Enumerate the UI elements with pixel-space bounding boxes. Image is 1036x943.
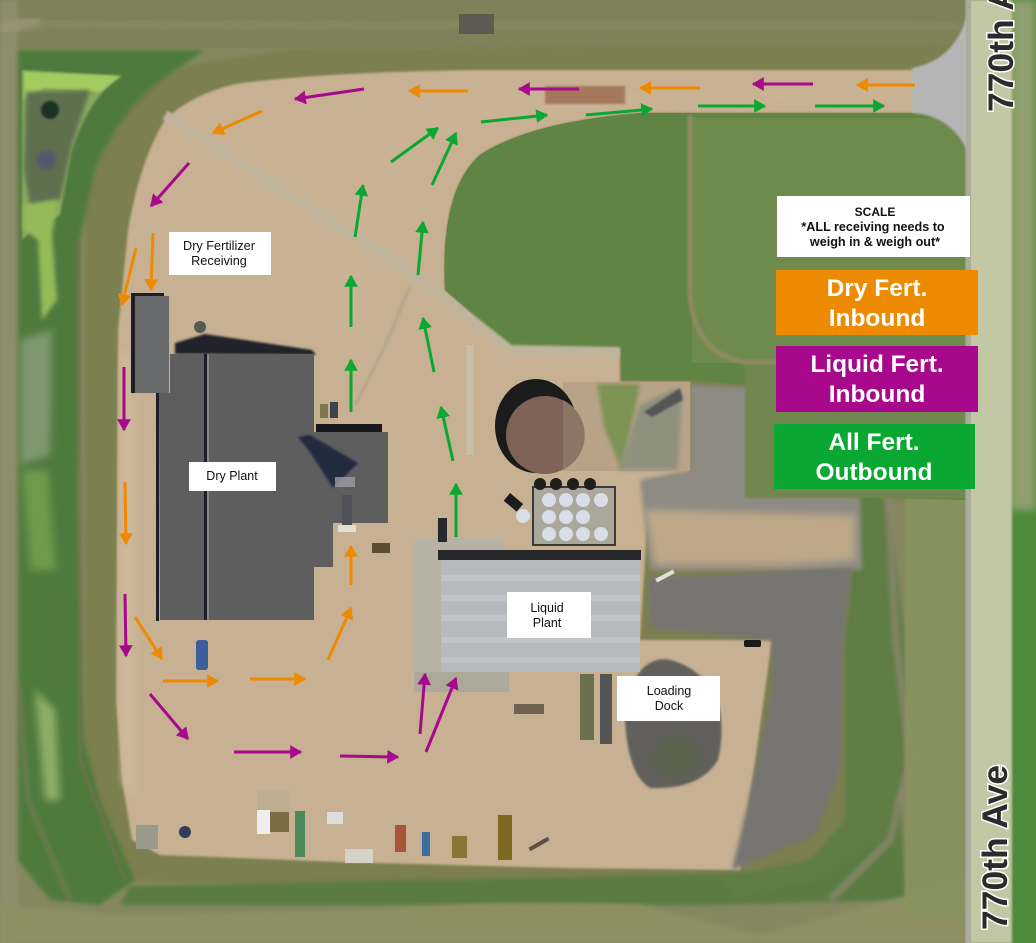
pipe rack and small shed north [459, 14, 625, 104]
liquid plant building [414, 518, 641, 692]
gravel drive [165, 115, 620, 352]
dark gravel pad [625, 659, 722, 788]
liquid plant loading equipment [514, 674, 612, 744]
olive ring around yard [85, 45, 966, 890]
legend: Dry Fert. Inbound [776, 270, 978, 335]
west wetland [18, 50, 205, 905]
label: Loading Dock: Dock [655, 699, 684, 713]
callout: scale note: *ALL receiving needs to [801, 220, 945, 234]
legend: Dry Fert. Inbound: Inbound [829, 305, 925, 332]
storage tank [495, 379, 690, 474]
label: Dry Plant [189, 462, 276, 491]
grass field [444, 113, 965, 500]
legend: Dry Fert. Inbound: Dry Fert. [827, 275, 927, 302]
legend: All Fert. Outbound: Outbound [815, 459, 933, 486]
label: Loading Dock [617, 676, 720, 721]
pickup truck [196, 640, 208, 670]
legend: Liquid Fert. Inbound [776, 346, 978, 412]
callout: scale note [777, 196, 970, 257]
road label: 770th Ave bottom: 770th Ave [975, 765, 1015, 930]
label: Dry Fertilizer Receiving: Dry Fertilizer [183, 239, 256, 253]
gravel lot [640, 385, 862, 570]
road verge [966, 0, 1036, 943]
arrows: liquid fertilizer inbound [124, 84, 813, 757]
callout: scale note: weigh in & weigh out* [809, 235, 940, 249]
label: Liquid Plant [507, 592, 591, 638]
label: Loading Dock: Loading [647, 684, 691, 698]
bottom vegetation strip [120, 800, 906, 905]
callout: scale note: SCALE [855, 205, 895, 219]
arrows: all fertilizer outbound [351, 106, 884, 537]
label: Dry Plant: Dry Plant [206, 469, 258, 483]
label: Liquid Plant: Plant [533, 616, 562, 630]
label: Dry Fertilizer Receiving [169, 232, 271, 275]
legend: Liquid Fert. Inbound: Liquid Fert. [810, 351, 944, 378]
paved road entrance [912, 15, 967, 150]
legend: All Fert. Outbound: All Fert. [828, 429, 920, 456]
chemical tanks [504, 478, 615, 545]
label: Liquid Plant: Liquid [530, 601, 564, 615]
east vegetation strip [720, 495, 906, 900]
label: Dry Fertilizer Receiving: Receiving [191, 254, 247, 268]
yard equipment row [136, 790, 550, 863]
dry plant building [131, 293, 390, 621]
legend: Liquid Fert. Inbound: Inbound [829, 381, 925, 408]
legend: All Fert. Outbound [774, 424, 975, 489]
arrows: dry fertilizer inbound [122, 85, 915, 681]
dirt yard [116, 70, 915, 870]
